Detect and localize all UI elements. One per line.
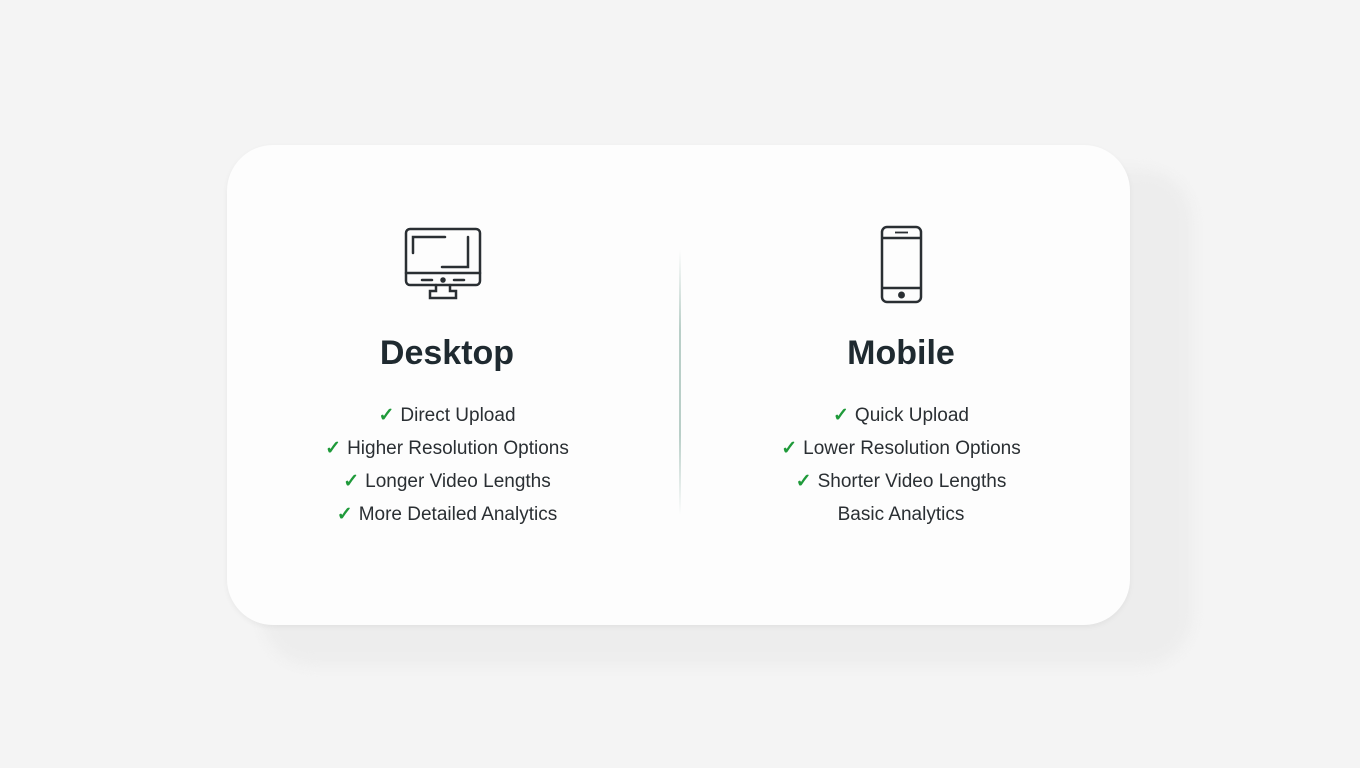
list: mobile features: Basic Analytics [838,504,964,525]
list: mobile features: ✓ Lower Resolution Options [781,438,1021,459]
icon: desktop monitor [404,228,482,300]
card panel [227,145,1130,625]
list: mobile features: ✓ Shorter Video Lengths [796,471,1006,492]
list: desktop features: ✓ More Detailed Analytics [337,504,557,525]
list: mobile features [781,405,1021,525]
list: desktop features [325,405,569,525]
divider [679,250,681,515]
list: desktop features: ✓ Direct Upload [378,405,516,426]
icon: mobile phone [880,226,922,304]
panel: mobile [781,226,1021,525]
panel: desktop [325,228,569,525]
list: desktop features: ✓ Longer Video Lengths [343,471,551,492]
heading: Mobile: Mobile [847,334,955,372]
list: mobile features: ✓ Quick Upload [833,405,969,426]
list: desktop features: ✓ Higher Resolution Options [325,438,569,459]
heading: Desktop: Desktop [380,334,514,372]
